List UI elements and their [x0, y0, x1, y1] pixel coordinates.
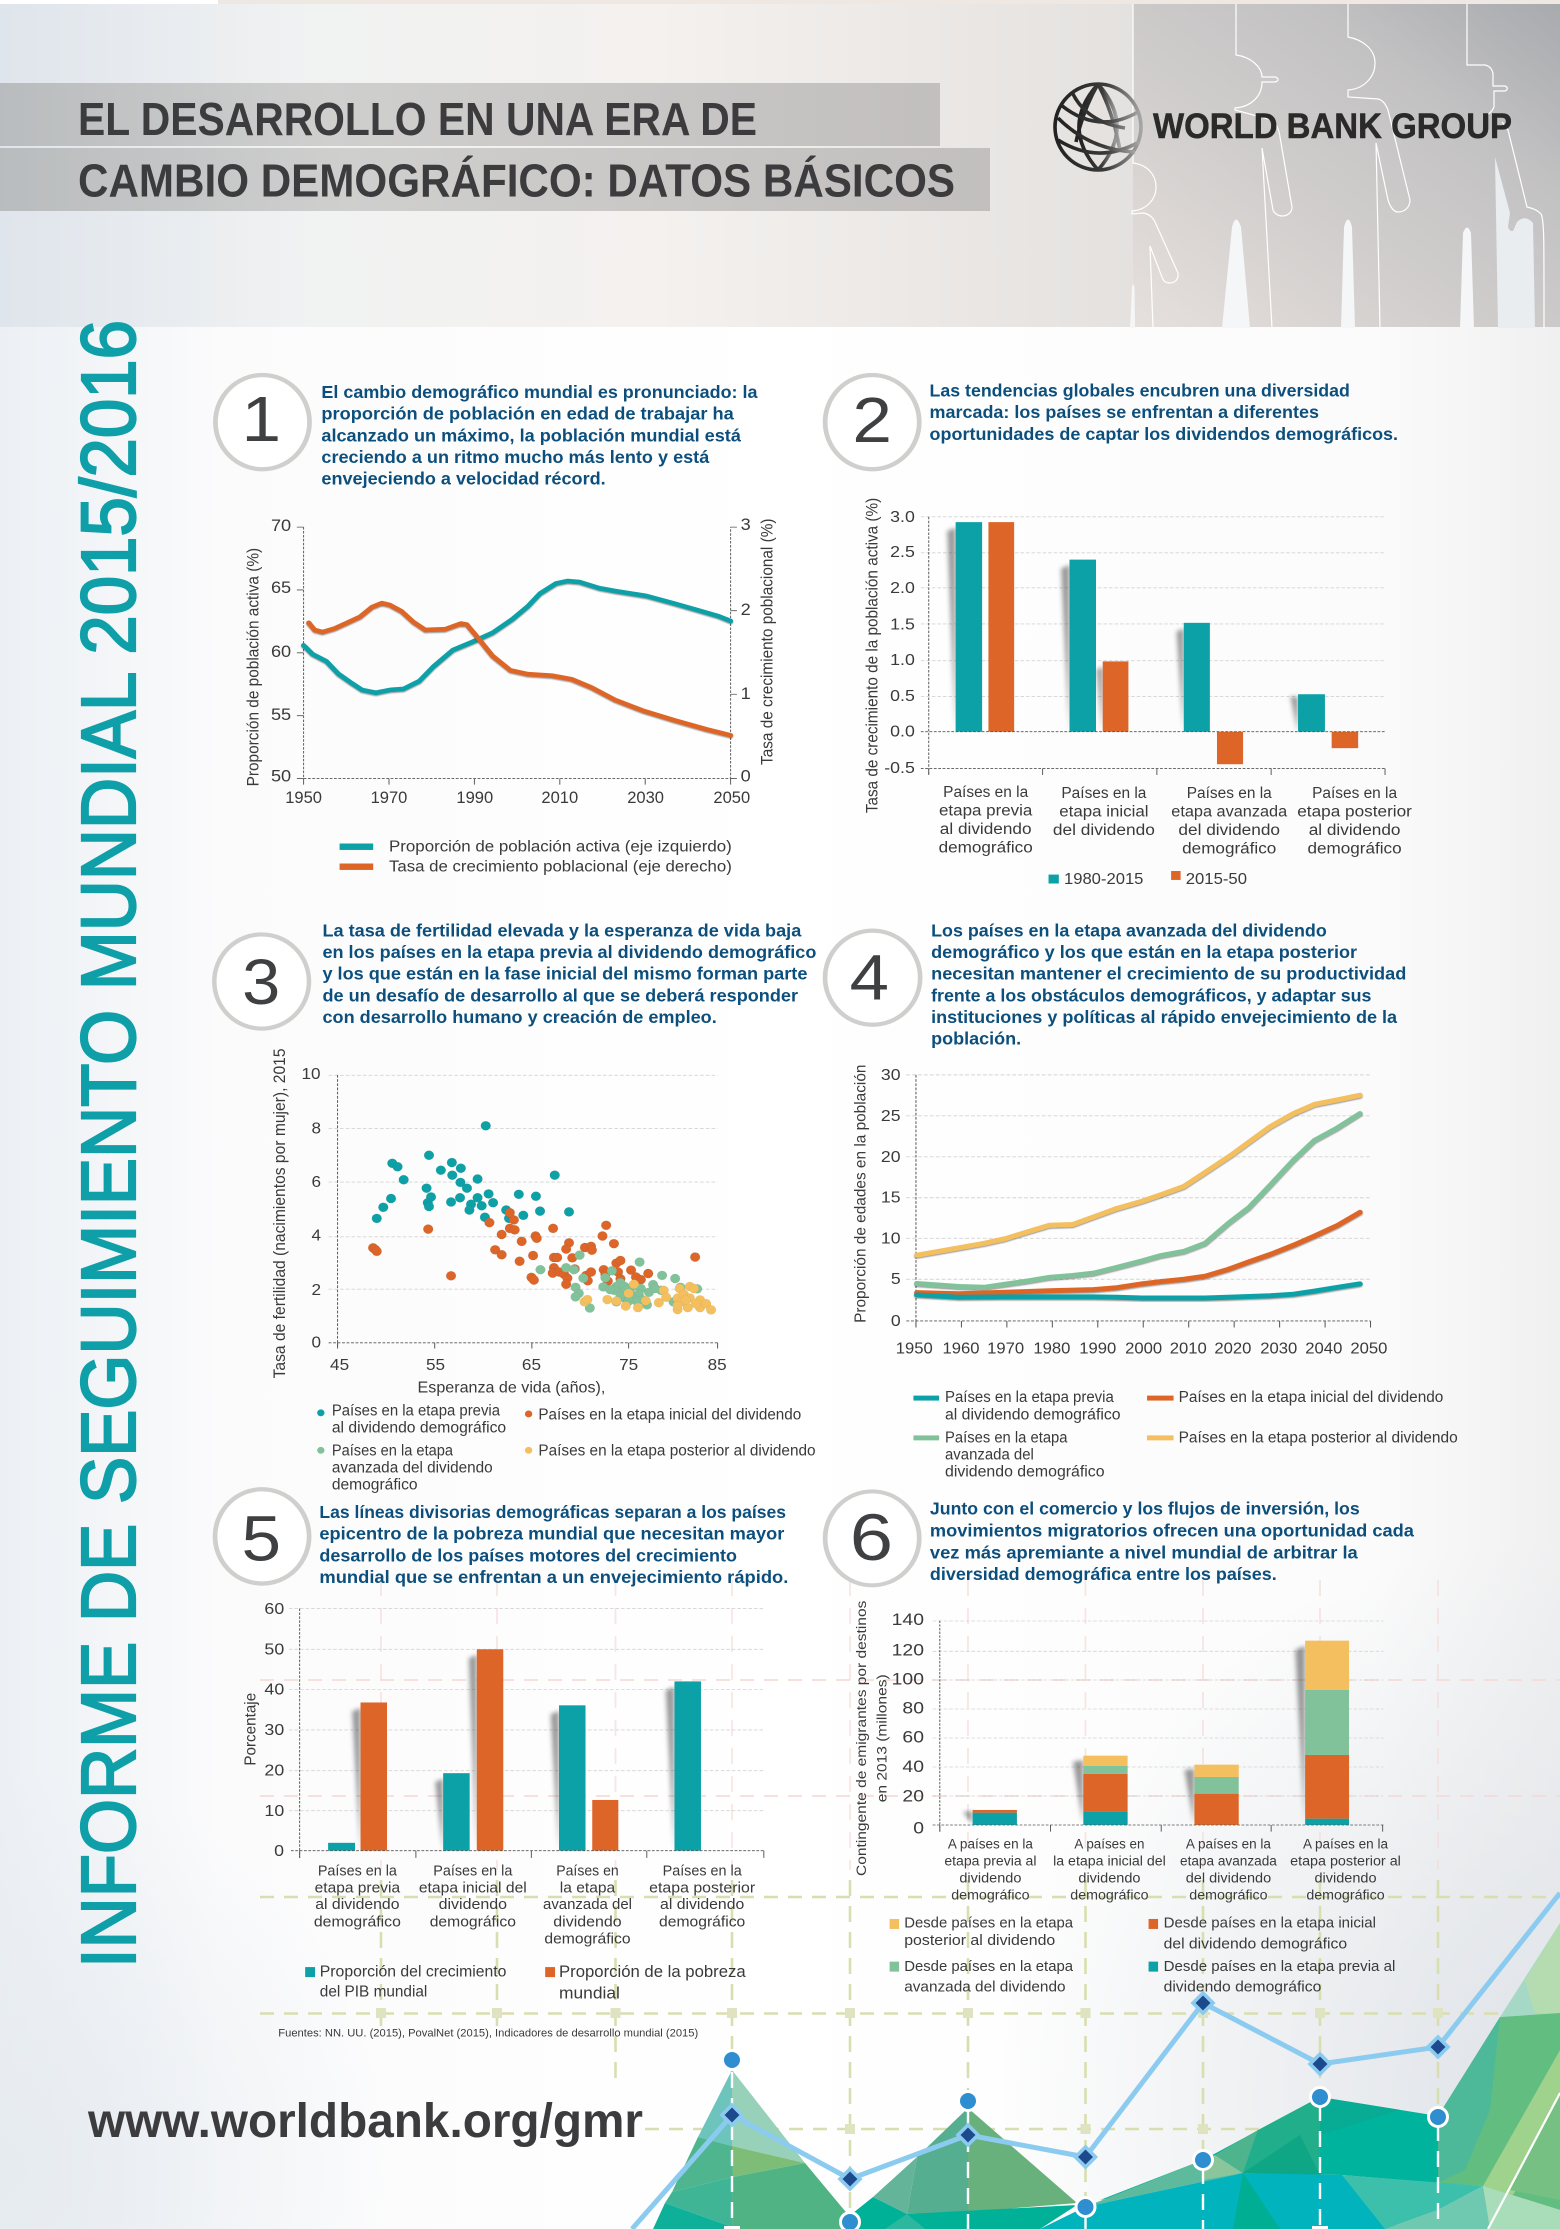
number badge 5 [215, 1489, 309, 1584]
line chart: elderly share by stage: 2030 [1260, 1339, 1297, 1357]
line chart: elderly share by stage: 2040 [1305, 1339, 1342, 1357]
bar chart: GDP growth and poverty shares: etapa previa [315, 1880, 400, 1896]
line chart: elderly share by stage: 30 [881, 1066, 901, 1084]
legend 6: Desde países en la etapa [904, 1958, 1074, 1975]
line chart: elderly share by stage [852, 1065, 1387, 1357]
scatter chart: fertility vs life expectancy: 85 [708, 1355, 727, 1374]
website url: www.worldbank.org/gmr [87, 2095, 643, 2148]
line chart: working-age share and population growth: 1950 [285, 788, 322, 807]
line chart: working-age share and population growth: 3 [741, 515, 751, 534]
heading 2: Las tendencias globales encubren una diversidad [930, 380, 1350, 400]
legend 3: Países en la etapa [332, 1443, 453, 1459]
line chart: elderly share by stage: 10 [881, 1229, 901, 1247]
decorative bottom chart: blue line with markers [632, 1893, 1560, 2229]
stacked bar chart: migrants by destination: 0 [913, 1819, 924, 1837]
bar chart: GDP growth and poverty shares: 10 [264, 1802, 284, 1820]
stacked bar chart: migrants by destination [853, 1600, 1401, 1903]
legend 4: Países en la etapa inicial del dividendo [1179, 1389, 1443, 1406]
line chart: working-age share and population growth: 2010 [541, 788, 578, 807]
bar chart: GDP growth and poverty shares: 20 [264, 1761, 284, 1779]
scatter chart: fertility vs life expectancy [271, 1048, 727, 1396]
bar chart: working-age growth: etapa inicial [1059, 802, 1149, 820]
heading 4: frente a los obstáculos demográficos, y adaptar sus [931, 986, 1371, 1006]
stacked bar chart: migrants by destination: A países en la [1186, 1836, 1271, 1852]
heading 4: población. [931, 1029, 1021, 1049]
line chart: elderly share by stage: 20 [881, 1147, 901, 1166]
bar chart: GDP growth and poverty shares: 60 [264, 1600, 284, 1618]
legend 3: Países en la etapa previa [332, 1403, 500, 1419]
bar chart: GDP growth and poverty shares: Países en [556, 1863, 619, 1879]
heading 5: Las líneas divisorias demográficas separan a los países [319, 1502, 786, 1522]
stacked bar chart: migrants by destination: la etapa inicial del [1053, 1854, 1166, 1869]
bar chart: GDP growth and poverty shares: 30 [264, 1721, 284, 1739]
bar chart: working-age growth: 0.5 [890, 687, 915, 705]
heading 3: con desarrollo humano y creación de empleo. [322, 1006, 717, 1027]
scatter chart: fertility vs life expectancy: 10 [301, 1065, 321, 1083]
line chart: elderly share by stage: 0 [891, 1312, 901, 1330]
heading 6: diversidad demográfica entre los países. [930, 1564, 1277, 1585]
legend 6: del dividendo demográfico [1164, 1936, 1347, 1952]
legend 5: del PIB mundial [320, 1983, 427, 2001]
line chart: elderly share by stage: 1990 [1079, 1339, 1116, 1357]
heading 2: marcada: los países se enfrentan a diferentes [930, 402, 1319, 422]
title: El desarrollo en una era de cambio demográfico: EL DESARROLLO EN UNA ERA DE [78, 93, 757, 145]
scatter chart: fertility vs life expectancy: 45 [330, 1355, 349, 1374]
line chart: working-age share and population growth: 55 [271, 705, 291, 724]
line chart: elderly share by stage: 25 [881, 1107, 901, 1125]
line chart: working-age share and population growth: 2030 [627, 788, 664, 807]
bar chart: working-age growth: demográfico [1182, 839, 1276, 857]
bar chart: working-age growth: 0.0 [890, 722, 915, 740]
panel 3 [214, 920, 816, 1494]
heading 1: proporción de población en edad de trabajar ha [321, 404, 734, 423]
bar chart: GDP growth and poverty shares: etapa inicial del [419, 1880, 527, 1896]
bar chart: working-age growth: del dividendo [1178, 821, 1280, 839]
bar chart: GDP growth and poverty shares: 40 [264, 1680, 284, 1698]
stacked bar chart: migrants by destination: 60 [902, 1728, 924, 1746]
scatter chart: fertility vs life expectancy: Tasa de fertilidad (nacimientos por mujer), 2015 [271, 1048, 289, 1378]
scatter chart: fertility vs life expectancy: Esperanza de vida (años), [418, 1378, 605, 1396]
background guide lines [260, 1580, 1560, 2229]
legend 3: avanzada del dividendo [332, 1460, 493, 1476]
line chart: working-age share and population growth: 2 [741, 600, 751, 619]
stacked bar chart: migrants by destination: demográfico [951, 1888, 1030, 1903]
panel 4 [825, 921, 1458, 1481]
stacked bar chart: migrants by destination: demográfico [1070, 1888, 1149, 1903]
legend 4: Países en la etapa previa [945, 1389, 1114, 1406]
number badge 3 [214, 934, 309, 1029]
panel 6 [825, 1491, 1415, 1995]
legend 3 [317, 1403, 816, 1494]
legend 3: demográfico [332, 1477, 418, 1494]
stacked bar chart: migrants by destination: A países en [1074, 1836, 1144, 1852]
legend 4: Países en la etapa posterior al dividendo [1179, 1429, 1458, 1446]
heading 4: instituciones y políticas al rápido envejecimiento de la [931, 1008, 1398, 1028]
panel 2 [825, 375, 1412, 888]
stacked bar chart: migrants by destination: dividendo [1314, 1871, 1377, 1886]
stacked bar chart: migrants by destination: A países en la [1303, 1836, 1388, 1852]
bar chart: GDP growth and poverty shares: demográfico [544, 1931, 631, 1947]
stacked bar chart: migrants by destination: 40 [902, 1757, 924, 1776]
number badge 6: 6 [850, 1502, 893, 1575]
legend 1: Proporción de población activa (eje izquierdo) [389, 837, 732, 855]
line chart: elderly share by stage: 2010 [1170, 1339, 1207, 1357]
legend 1: Tasa de crecimiento poblacional (eje derecho) [389, 857, 732, 875]
scatter chart: fertility vs life expectancy: 55 [426, 1355, 445, 1374]
bar chart: GDP growth and poverty shares: Países en la [433, 1863, 513, 1879]
bar chart: GDP growth and poverty shares: demográfico [430, 1914, 516, 1930]
bar chart: working-age growth: Países en la [1187, 784, 1272, 802]
legend 6: Desde países en la etapa previa al [1164, 1958, 1395, 1975]
heading 1: alcanzado un máximo, la población mundial está [321, 425, 741, 445]
stacked bar chart: migrants by destination: 20 [902, 1787, 924, 1805]
legend 4: al dividendo demográfico [945, 1406, 1121, 1423]
line chart: working-age share and population growth: 65 [271, 578, 291, 597]
legend 6: Desde países en la etapa inicial [1164, 1915, 1376, 1931]
number badge 1 [215, 375, 310, 469]
heading 6: Junto con el comercio y los flujos de inversión, los [930, 1499, 1360, 1519]
bar chart: GDP growth and poverty shares [242, 1600, 765, 1947]
legend 6: avanzada del dividendo [904, 1979, 1066, 1995]
stacked bar chart: migrants by destination: etapa previa al [944, 1854, 1036, 1869]
bar chart: working-age growth: 2.0 [890, 579, 915, 597]
bar chart: working-age growth: demográfico [1308, 839, 1402, 857]
line chart: working-age share and population growth: 60 [271, 642, 291, 661]
stacked bar chart: migrants by destination: etapa avanzada [1180, 1854, 1277, 1869]
line chart: working-age share and population growth: 1 [741, 684, 751, 703]
bar chart: GDP growth and poverty shares: al dividendo [660, 1897, 744, 1913]
legend 4 [913, 1389, 1458, 1481]
bar chart: GDP growth and poverty shares: Países en la [663, 1863, 742, 1879]
bar chart: GDP growth and poverty shares: la etapa [560, 1880, 615, 1896]
title: El desarrollo en una era de cambio demográfico [0, 83, 990, 211]
number badge 2 [825, 375, 919, 469]
bar chart: GDP growth and poverty shares: 50 [264, 1640, 284, 1658]
heading 1 [321, 382, 758, 488]
legend 4: dividendo demográfico [945, 1463, 1105, 1481]
scatter chart: fertility vs life expectancy: 8 [312, 1119, 321, 1137]
line chart: elderly share by stage: 1960 [942, 1339, 980, 1357]
scatter chart: fertility vs life expectancy: 75 [619, 1355, 638, 1374]
number badge 4 [825, 931, 920, 1025]
legend 6: dividendo demográfico [1164, 1979, 1321, 1995]
legend 1 [340, 837, 732, 875]
legend 6: posterior al dividendo [904, 1932, 1055, 1949]
logo: World Bank Group: WORLD BANK GROUP [1153, 107, 1512, 146]
bar chart: working-age growth: Países en la [1312, 784, 1398, 802]
line chart: working-age share and population growth: Tasa de crecimiento poblacional (%) [759, 519, 777, 765]
heading 2: oportunidades de captar los dividendos demográficos. [930, 424, 1398, 444]
heading 6: movimientos migratorios ofrecen una oportunidad cada [930, 1521, 1415, 1541]
bar chart: working-age growth: demográfico [939, 838, 1033, 856]
heading 4: Los países en la etapa avanzada del dividendo [931, 921, 1327, 941]
bar chart: working-age growth: del dividendo [1053, 821, 1155, 839]
legend 4: avanzada del [945, 1446, 1034, 1463]
decorative bottom chart: mountains [653, 1923, 1560, 2229]
bar chart: working-age growth: al dividendo [1309, 821, 1400, 839]
line chart: elderly share by stage: 1950 [896, 1339, 933, 1357]
legend 3: Países en la etapa posterior al dividendo [538, 1443, 816, 1459]
header band [0, 0, 1560, 328]
line chart: elderly share by stage: Proporción de edades en la población [852, 1065, 870, 1323]
legend 4: Países en la etapa [945, 1429, 1068, 1446]
heading 3 [322, 920, 816, 1027]
line chart: elderly share by stage: 1970 [987, 1339, 1024, 1357]
line chart: elderly share by stage: 2000 [1125, 1339, 1162, 1357]
panel 1 [215, 375, 777, 875]
legend 2 [1049, 870, 1247, 888]
bar chart: working-age growth: 3.0 [890, 508, 915, 526]
logo: World Bank Group [1055, 84, 1512, 170]
number badge 5: 5 [241, 1503, 281, 1575]
heading 1: El cambio demográfico mundial es pronunciado: la [321, 382, 758, 402]
legend 3: al dividendo demográfico [332, 1420, 506, 1437]
bar chart: working-age growth: 2.5 [890, 543, 915, 561]
stacked bar chart: migrants by destination: 100 [892, 1670, 924, 1688]
line chart: working-age share and population growth: 0 [741, 767, 751, 786]
bar chart: GDP growth and poverty shares: Porcentaje [242, 1693, 260, 1766]
legend 2: 1980-2015 [1064, 870, 1143, 888]
bar chart: working-age growth: Países en la [943, 783, 1029, 801]
stacked bar chart: migrants by destination: dividendo [959, 1871, 1021, 1886]
stacked bar chart: migrants by destination: etapa posterior al [1290, 1854, 1401, 1869]
heading 4 [931, 921, 1406, 1049]
stacked bar chart: migrants by destination: dividendo [1078, 1871, 1140, 1886]
legend 5: Proporción del crecimiento [320, 1962, 506, 1980]
legend 5 [305, 1962, 746, 2002]
number badge 1: 1 [241, 384, 281, 455]
line chart: working-age share and population growth: 50 [271, 766, 291, 785]
line chart: working-age share and population growth: Proporción de población activa (%) [245, 548, 263, 786]
bar chart: GDP growth and poverty shares: al dividendo [315, 1897, 400, 1913]
bar chart: working-age growth: al dividendo [940, 820, 1032, 838]
heading 6 [930, 1499, 1415, 1585]
heading 5: mundial que se enfrentan a un envejecimiento rápido. [319, 1567, 788, 1587]
vertical report title: INFORME DE SEGUIMIENTO MUNDIAL 2015/2016 [66, 320, 152, 1968]
legend 5: Proporción de la pobreza [559, 1962, 746, 1981]
heading 6: vez más apremiante a nivel mundial de arbitrar la [930, 1543, 1359, 1563]
bar chart: GDP growth and poverty shares: avanzada del [543, 1897, 632, 1913]
scatter chart: fertility vs life expectancy: 6 [312, 1173, 321, 1191]
heading 3: La tasa de fertilidad elevada y la esperanza de vida baja [322, 920, 802, 940]
line chart: working-age share and population growth: 2050 [713, 788, 750, 807]
bar chart: working-age growth: 1.5 [890, 615, 915, 633]
line chart: working-age share and population growth: 1990 [456, 788, 493, 807]
number badge 4: 4 [850, 942, 889, 1014]
bar chart: GDP growth and poverty shares: dividendo [553, 1914, 622, 1930]
stacked bar chart: migrants by destination: demográfico [1306, 1888, 1385, 1903]
heading 2 [930, 380, 1398, 444]
bar chart: GDP growth and poverty shares: demográfico [314, 1914, 401, 1930]
panel 5 [215, 1489, 788, 2039]
stacked bar chart: migrants by destination: 120 [892, 1641, 924, 1659]
stacked bar chart: migrants by destination: Contingente de emigrantes por destinos [853, 1600, 869, 1876]
bar chart: GDP growth and poverty shares: Países en la [318, 1863, 397, 1879]
scatter chart: fertility vs life expectancy: 65 [522, 1355, 541, 1374]
stacked bar chart: migrants by destination: A países en la [948, 1836, 1033, 1852]
legend 6 [890, 1915, 1395, 1995]
scatter chart: fertility vs life expectancy: 4 [312, 1226, 321, 1244]
bar chart: working-age growth: Países en la [1061, 784, 1147, 802]
legend 5: mundial [559, 1983, 620, 2002]
heading 1: envejeciendo a velocidad récord. [321, 469, 606, 488]
title: El desarrollo en una era de cambio demográfico: CAMBIO DEMOGRÁFICO: DATOS BÁSICOS [78, 154, 955, 206]
line chart: elderly share by stage: 2050 [1350, 1339, 1387, 1357]
bar chart: working-age growth [864, 498, 1412, 857]
sources note: Fuentes: NN. UU. (2015), PovalNet (2015), Indicadores de desarrollo mundial (2015) [278, 2026, 698, 2039]
heading 3: en los países en la etapa previa al dividendo demográfico [322, 942, 816, 962]
heading 1: creciendo a un ritmo mucho más lento y está [321, 447, 710, 467]
stacked bar chart: migrants by destination: en 2013 (millones) [873, 1674, 890, 1802]
bar chart: working-age growth: -0.5 [884, 759, 915, 777]
stacked bar chart: migrants by destination: 80 [902, 1699, 924, 1717]
heading 3: y los que están en la fase inicial del mismo forman parte [322, 963, 807, 983]
line chart: working-age share and population growth: 1970 [371, 788, 407, 807]
stacked bar chart: migrants by destination: demográfico [1189, 1888, 1268, 1903]
heading 4: demográfico y los que están en la etapa posterior [931, 943, 1358, 963]
bar chart: GDP growth and poverty shares: etapa posterior [649, 1880, 755, 1896]
bar chart: GDP growth and poverty shares: 0 [274, 1842, 284, 1860]
heading 5: epicentro de la pobreza mundial que necesitan mayor [319, 1524, 785, 1543]
scatter chart: fertility vs life expectancy: 2 [312, 1280, 321, 1299]
heading 5: desarrollo de los países motores del crecimiento [319, 1545, 737, 1565]
number badge 3: 3 [242, 947, 280, 1019]
bar chart: working-age growth: etapa posterior [1297, 802, 1412, 820]
stacked bar chart: migrants by destination: 140 [892, 1610, 924, 1629]
heading 5 [319, 1502, 788, 1587]
bar chart: working-age growth: etapa avanzada [1171, 802, 1288, 820]
bar chart: GDP growth and poverty shares: dividendo [439, 1897, 507, 1913]
stacked bar chart: migrants by destination: del dividendo [1186, 1871, 1271, 1886]
heading 4: necesitan mantener el crecimiento de su productividad [931, 964, 1406, 984]
line chart: elderly share by stage: 15 [881, 1188, 901, 1207]
line chart: elderly share by stage: 5 [891, 1270, 901, 1288]
legend 2: 2015-50 [1186, 870, 1247, 888]
legend 6: Desde países en la etapa [904, 1915, 1074, 1931]
line chart: elderly share by stage: 2020 [1214, 1339, 1251, 1357]
heading 3: de un desafío de desarrollo al que se deberá responder [322, 985, 798, 1005]
legend 3: Países en la etapa inicial del dividendo [538, 1407, 801, 1423]
bar chart: working-age growth: Tasa de crecimiento de la población activa (%) [864, 498, 882, 813]
bar chart: GDP growth and poverty shares: demográfico [659, 1914, 745, 1930]
bar chart: working-age growth: 1.0 [890, 651, 915, 669]
number badge 6 [825, 1491, 919, 1585]
bar chart: working-age growth: etapa previa [939, 801, 1033, 819]
line chart: elderly share by stage: 1980 [1033, 1339, 1070, 1357]
line chart: working-age share and population growth [245, 515, 777, 807]
scatter chart: fertility vs life expectancy: 0 [312, 1333, 321, 1352]
number badge 2: 2 [852, 385, 892, 456]
line chart: working-age share and population growth: 70 [271, 516, 291, 535]
